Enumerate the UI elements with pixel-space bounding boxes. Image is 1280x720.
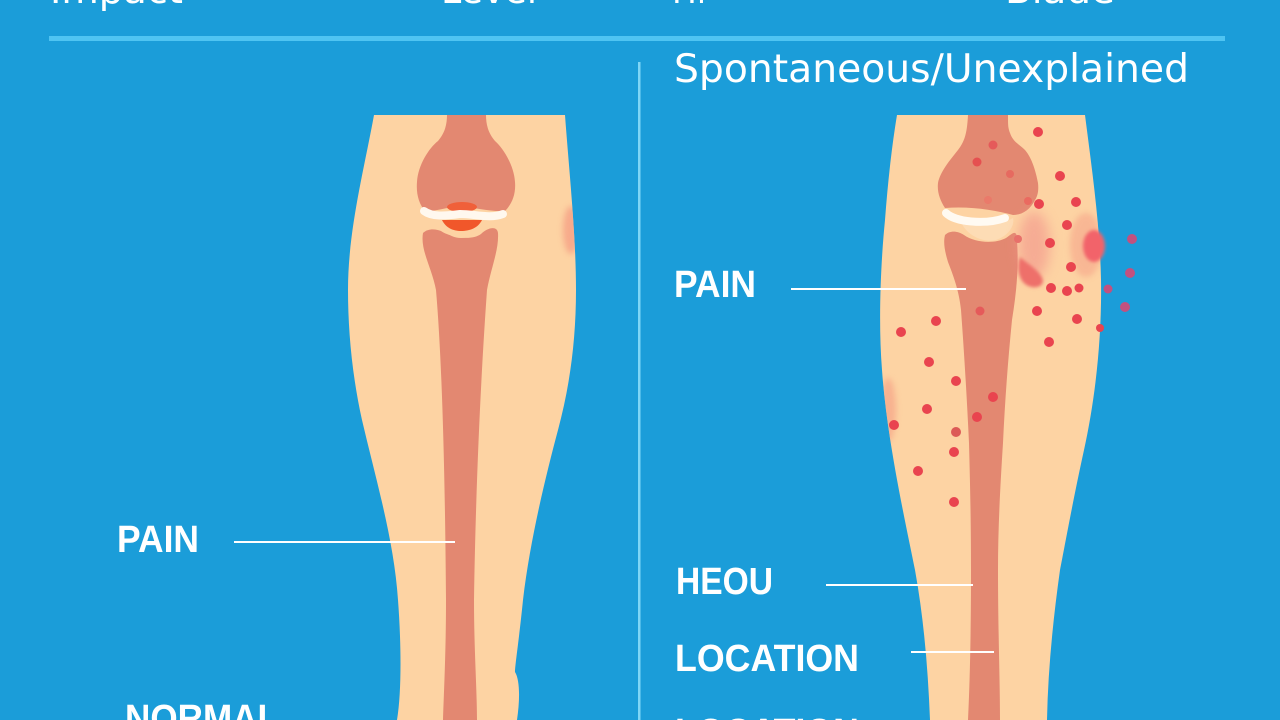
- tibia bone: [944, 232, 1018, 720]
- inflammation: outer edge: [1083, 230, 1105, 262]
- leg outline: [348, 115, 576, 720]
- tibia bone: [423, 228, 498, 720]
- leg outline: [880, 115, 1101, 720]
- cartilage: [946, 213, 1005, 222]
- panel: normal leg: [348, 115, 579, 720]
- knee femur bone: [417, 115, 515, 211]
- glow: lower left: [880, 378, 896, 442]
- panel: painful leg: [880, 115, 1137, 720]
- panel divider: [638, 62, 640, 720]
- glow: outer knee: [1070, 213, 1102, 277]
- joint capsule: [962, 218, 1013, 241]
- header labels (cropped): [50, 0, 1115, 12]
- joint inflammation: [447, 202, 477, 212]
- soft pain glow: [563, 206, 579, 254]
- pain dots: [889, 127, 1104, 507]
- inflammation: knee side: [1018, 257, 1043, 287]
- label: pain, painful leg: PAIN: [674, 264, 756, 306]
- label: pain, normal leg: PAIN: [117, 519, 199, 561]
- glow: around knee: [1018, 211, 1050, 279]
- label: heou: HEOU: [676, 561, 773, 603]
- dots outside leg: [1104, 234, 1137, 312]
- title: spontaneous: Spontaneous/Unexplained: [674, 47, 1189, 92]
- joint cavity: [434, 216, 491, 238]
- knee femur bone: [938, 115, 1038, 215]
- header divider: [49, 36, 1225, 41]
- label: location: LOCATION: [675, 638, 859, 680]
- cartilage: [424, 211, 503, 216]
